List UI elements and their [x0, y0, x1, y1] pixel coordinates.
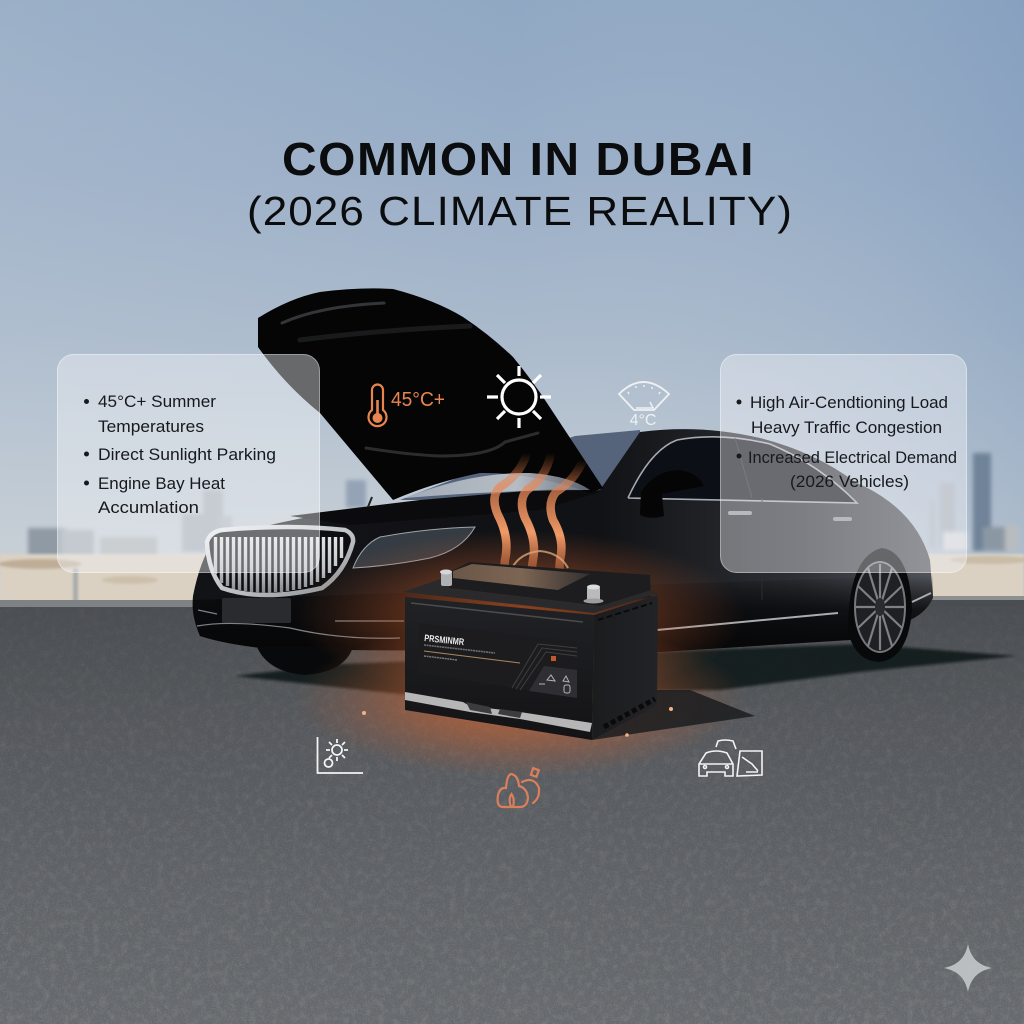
car: side mirror [640, 470, 704, 518]
car: window chrome [628, 437, 857, 503]
car: lower shading [193, 575, 933, 652]
battery: front face [405, 597, 594, 740]
battery: label chevrons [512, 644, 577, 690]
car: door shut lines [735, 438, 762, 600]
icon: traffic and map [699, 740, 762, 776]
car: body [193, 429, 933, 652]
bullet list: driving and electrical load: (2026 Vehicles) [790, 472, 909, 491]
battery: silver base strip [405, 692, 592, 732]
bullet list: driving and electrical load [736, 393, 957, 491]
bullet list: climate factors: 45°C+ Summer [98, 392, 216, 411]
car: front wheel [257, 647, 353, 675]
battery: warning block [529, 666, 577, 698]
car: bumper trim [197, 610, 404, 638]
battery glow on car and ground [295, 530, 745, 778]
panel: right glass card [720, 354, 966, 572]
car: side windows [628, 437, 857, 503]
car [193, 429, 933, 675]
battery: raised lid [449, 562, 651, 606]
car: engine bay [290, 488, 600, 525]
background: asphalt road [0, 596, 1024, 1024]
battery: terminal right [584, 584, 604, 604]
battery: top rim line [411, 603, 583, 622]
background: Dubai skyline [28, 453, 1019, 558]
icon: sun [487, 366, 551, 428]
battery: wheel motif behind [512, 551, 568, 568]
icon: windscreen gauge with 4°C [619, 382, 669, 429]
bullet list: climate factors: Accumlation [98, 498, 199, 517]
car: grille [207, 527, 353, 595]
heat waves [494, 453, 583, 585]
open hood [258, 288, 603, 507]
bullet list: climate factors [84, 392, 276, 517]
title: COMMON IN DUBAI [282, 133, 755, 185]
car: licence plate [222, 598, 291, 623]
icon: thermometer with 45°C+: 45°C+ [391, 389, 445, 411]
battery: base clips [466, 702, 522, 718]
car: headlight [353, 527, 475, 568]
bullet list: driving and electrical load: High Air-Cendtioning Load [750, 393, 948, 412]
car battery [403, 551, 658, 740]
battery: right side [592, 595, 658, 740]
title: (2026 CLIMATE REALITY) [247, 188, 793, 234]
icon: engine heat flame [498, 768, 539, 807]
sparks [362, 707, 673, 737]
bullet list: driving and electrical load: Heavy Traffic Congestion [751, 418, 942, 437]
bullet list: driving and electrical load: Increased Electrical Demand [748, 448, 957, 467]
car: side chrome strip [657, 593, 931, 630]
panel: left glass card [58, 354, 320, 572]
icon: windscreen gauge with 4°C: 4°C [630, 412, 656, 429]
battery: lid reflection [453, 564, 590, 590]
icon: thermometer with 45°C+ [368, 385, 445, 426]
hood: inner highlights [282, 303, 538, 456]
battery: terminal left [440, 570, 452, 586]
battery: top [403, 576, 658, 613]
car: rear wheel [848, 548, 912, 662]
hood strut [368, 497, 372, 507]
battery shadow [592, 690, 755, 740]
background: desert sand [0, 554, 1024, 602]
car: door handles [728, 511, 852, 521]
windshield reflection below hood [405, 473, 590, 498]
title [247, 133, 793, 234]
bullet list: climate factors: Engine Bay Heat [98, 474, 225, 493]
icon: sparkle watermark [944, 944, 992, 992]
battery: brand name: PRSMINMR [424, 633, 465, 648]
car: windshield behind hood [400, 430, 640, 500]
battery: side vents [604, 699, 655, 727]
car ground shadow [235, 644, 1016, 694]
battery: label panel [419, 623, 577, 698]
bullet list: climate factors: Temperatures [98, 417, 204, 436]
bullet list: climate factors: Direct Sunlight Parking [98, 445, 276, 464]
background: sky [0, 0, 1024, 610]
icon: sun exposure chart [318, 737, 363, 773]
